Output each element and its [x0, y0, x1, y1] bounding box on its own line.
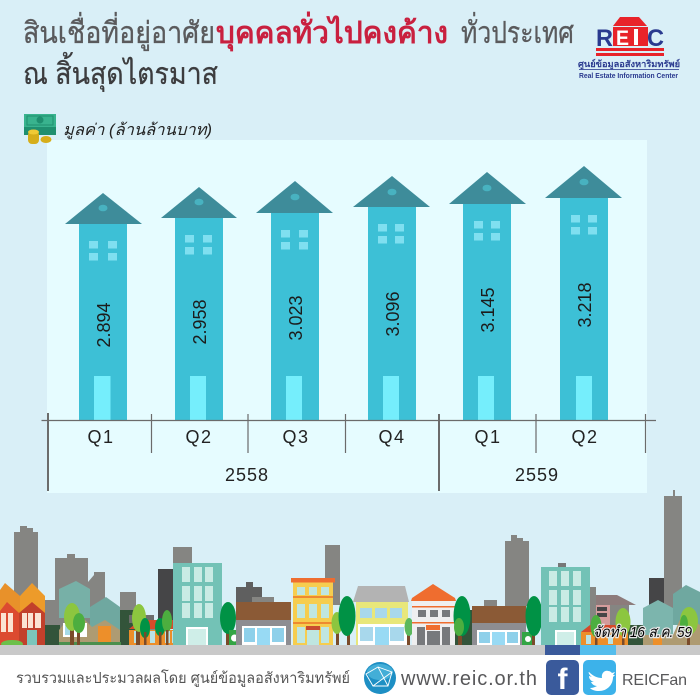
- logo: REIC: Real Estate Information Center: [579, 71, 678, 80]
- icon: twitter: [583, 660, 616, 695]
- house bar: Q1 2559: [449, 172, 526, 420]
- date note: จัดทำ 16 ส.ค. 59: [593, 624, 693, 641]
- road: [0, 645, 700, 655]
- logo: REIC: ศูนย์ข้อมูลอสังหาริมทรัพย์: [578, 58, 680, 70]
- icon: money and coins: [24, 114, 56, 144]
- house bar: Q2 2558: [161, 187, 237, 420]
- house bar: Q3 2558: 3.023: [286, 295, 306, 341]
- logo: REIC: C: [647, 25, 664, 52]
- axis labels: quarters and years: Q2: [185, 427, 213, 447]
- title: บุคคลทั่วไปคงค้าง: [216, 11, 448, 52]
- road stripes: social colours: [545, 645, 616, 655]
- axis labels: quarters and years: 2559: [515, 465, 559, 485]
- house bar: Q2 2558: 2.958: [190, 299, 210, 345]
- axis labels: quarters and years: Q1: [474, 427, 502, 447]
- house bar: Q1 2558: [65, 193, 142, 420]
- logo: REIC: E: [616, 27, 629, 50]
- footer credit: รวบรวมและประมวลผลโดย ศูนย์ข้อมูลอสังหาริมทรัพย์: [16, 669, 350, 687]
- title: สินเชื่อที่อยู่อาศัย: [23, 12, 215, 51]
- axis labels: quarters and years: Q3: [282, 427, 310, 447]
- icon: facebook: f: [558, 663, 568, 696]
- icon: facebook: [546, 660, 579, 696]
- title: [23, 11, 574, 93]
- title: ณ สิ้นสุดไตรมาส: [23, 52, 218, 93]
- house bar: Q2 2559: [545, 166, 622, 420]
- logo: REIC: R: [596, 25, 613, 52]
- axis labels: quarters and years: [87, 427, 599, 485]
- axis labels: quarters and years: Q2: [571, 427, 599, 447]
- house bar: Q1 2559: 3.145: [478, 287, 498, 333]
- website: www.reic.or.th: [400, 668, 537, 690]
- house bar: Q4 2558: 3.096: [383, 291, 403, 337]
- icon: globe: [364, 662, 396, 694]
- logo: REIC: [578, 17, 680, 80]
- axis labels: quarters and years: Q1: [87, 427, 115, 447]
- chart label: unit: มูลค่า (ล้านล้านบาท): [63, 121, 212, 140]
- axis labels: quarters and years: 2558: [225, 465, 269, 485]
- social name: REICFan: [622, 672, 687, 689]
- illustration: city skyline: [0, 490, 700, 648]
- bar chart: house columns: [65, 166, 622, 420]
- house bar: Q1 2558: 2.894: [94, 302, 114, 348]
- title: ทั่วประเทศ: [461, 12, 574, 50]
- house bar: Q4 2558: [353, 176, 430, 420]
- house bar: Q3 2558: [256, 181, 333, 420]
- chart panel: [47, 140, 647, 493]
- chart axis: [42, 413, 656, 491]
- axis labels: quarters and years: Q4: [378, 427, 406, 447]
- house bar: Q2 2559: 3.218: [575, 282, 595, 328]
- footer band: [0, 655, 700, 700]
